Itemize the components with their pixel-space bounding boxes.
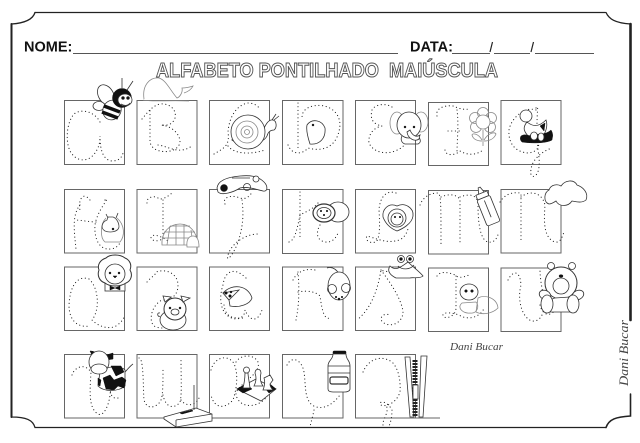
icon: cow bbox=[89, 351, 133, 390]
letter boxes grid bbox=[64, 100, 561, 418]
vertical signature: Dani Bucar bbox=[616, 319, 631, 387]
title: ALFABETO PONTILHADO MAIÚSCULA bbox=[156, 58, 498, 82]
icon: lion bbox=[383, 205, 413, 231]
icon: pig bbox=[158, 296, 190, 330]
dotted letters bbox=[67, 103, 564, 428]
icon: cloud bbox=[545, 181, 587, 206]
icon: chess pieces bbox=[237, 367, 276, 401]
icon: bird bbox=[307, 121, 325, 144]
icon: snail bbox=[231, 114, 279, 149]
icon: mouse bbox=[327, 267, 350, 300]
icon: zipper bbox=[405, 356, 427, 417]
icon: baby bottle bbox=[473, 185, 500, 226]
icon: cheese bbox=[223, 287, 252, 307]
icon: bee bbox=[93, 78, 133, 123]
icon: frog bbox=[389, 256, 423, 278]
heading: name field: NOME: bbox=[24, 40, 72, 56]
heading: date field bbox=[410, 40, 594, 56]
icon: flower bbox=[470, 108, 496, 146]
icon: duck on nest bbox=[520, 110, 553, 143]
icon: hippo bbox=[101, 213, 123, 242]
icon: whale bbox=[143, 78, 193, 101]
icon: lizard bbox=[217, 176, 267, 194]
signature: Dani Bucar bbox=[449, 341, 504, 353]
icon: teddy bear bbox=[538, 262, 585, 313]
icon: router bbox=[164, 385, 212, 427]
icon: igloo bbox=[162, 224, 199, 247]
icon: turtle bbox=[460, 284, 498, 314]
icon: yogurt bottle bbox=[328, 351, 350, 392]
icon: kiwi bbox=[313, 202, 349, 222]
heading: date field: DATA: bbox=[410, 40, 453, 56]
icon: sheep bbox=[98, 255, 131, 291]
icon: elephant bbox=[390, 112, 428, 144]
